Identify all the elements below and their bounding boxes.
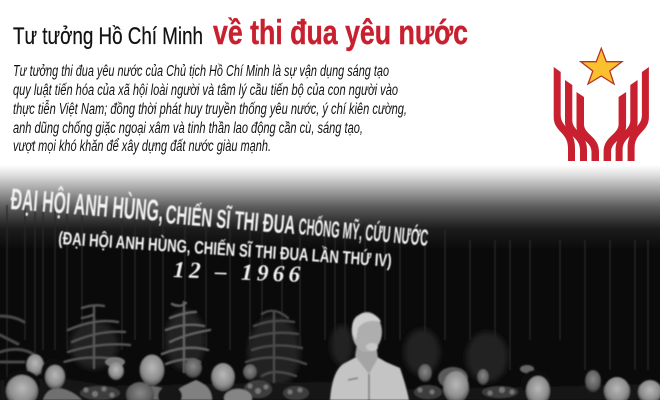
jacket [330,354,409,400]
emblem left bars [554,67,599,161]
banner date: 12 – 1966 [173,257,301,287]
tree three [162,302,210,372]
face: right back row [585,370,601,392]
photo backdrop gradient [0,165,660,400]
banner text on stage [9,182,429,287]
head: front bald man [126,382,154,400]
title [13,14,468,52]
head: dark hair front [158,386,182,400]
soft foliage masses behind the trees [70,310,508,388]
dark crowd base [0,378,660,400]
hair [352,313,381,340]
tree far left [0,316,33,362]
President Ho Chi Minh standing [330,312,409,400]
neck [355,344,378,374]
beard [366,343,378,351]
face: young man [184,358,202,378]
face: back row dim one [418,364,432,382]
collar shadow and pocket [348,374,369,400]
shoulders [43,380,252,400]
paragraph line 5: vượt mọi khó khăn để xây dựng đất nước giàu mạnh. [13,138,271,155]
face: smiling man [438,367,469,400]
heading: red part: về thi đua yêu nước [213,14,468,52]
tree four [246,311,306,392]
face: far right man [638,380,660,400]
paragraph line 3: thực tiễn Việt Nam; đồng thời phát huy truyền thống yêu nước, ý chí kiên cường, [13,101,407,118]
face: back row left [26,354,44,376]
emblem right bars [604,67,649,161]
potted trees on stage [0,302,306,392]
intro paragraph [13,63,407,155]
head [352,312,382,352]
audience faces [4,354,660,400]
paragraph line 4: anh dũng chống giặc ngoại xâm và tinh thần lao động cần cù, sáng tạo, [13,120,363,137]
face: back row man [243,364,257,380]
face: grey-haired man [140,354,164,386]
face: dark-haired man [521,370,551,400]
face: woman [41,358,67,389]
banner line one, middle part: CHIẾN SĨ THI ĐUA [164,199,297,240]
heading: black part: Tư tưởng Hồ Chí Minh [13,23,203,50]
paragraph line 2: quy luật tiến hóa của xã hội loài người và tâm lý cầu tiến bộ của con người vào [13,82,398,99]
icon: emulation emblem [554,48,649,161]
face: man centre left [211,363,235,391]
face: man in cap [105,357,125,380]
face: distant head [520,365,534,373]
panel: historic photograph: CHỐNG MỸ, CỨU NƯỚC [298,212,429,251]
stage curtain folds [7,200,648,400]
face: front left man [4,370,40,400]
seated audience [0,354,660,400]
banner line two: (ĐẠI HỘI ANH HÙNG, CHIẾN SĨ THI ĐUA LẦN THỨ IV) [58,227,392,271]
tree two [64,305,130,368]
flower arrangements [80,380,518,400]
face: back row dim two [477,369,489,385]
face: right man [604,377,630,400]
panel: historic photograph [0,165,660,400]
paragraph line 1: Tư tưởng thi đua yêu nước của Chủ tịch Hồ Chí Minh là sự vận dụng sáng tạo [13,63,389,80]
emblem star [581,48,622,84]
banner line one, first part: ĐẠI HỘI ANH HÙNG, [9,182,165,228]
